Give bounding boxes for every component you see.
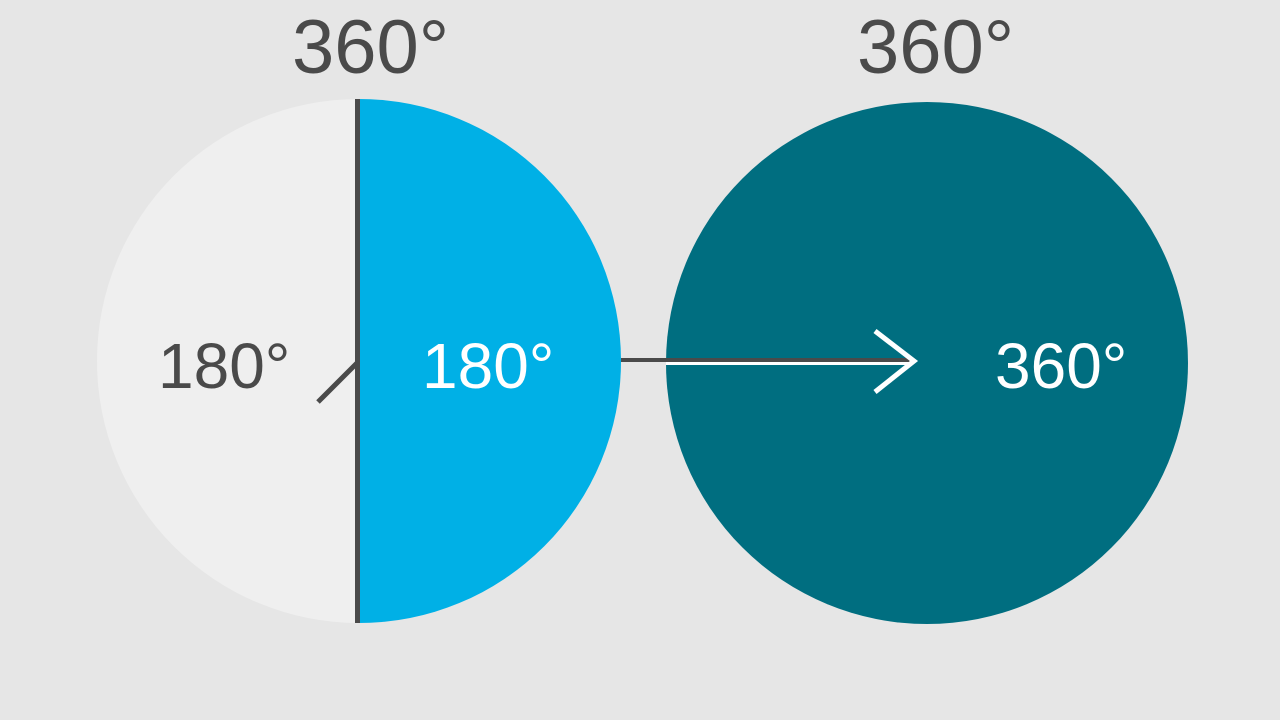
label right half 180°: 180° [422,330,554,402]
label right circle 360°: 360° [995,330,1127,402]
heading left: 360°: 360° [292,5,449,90]
right circle [666,102,1188,624]
label left half 180°: 180° [158,330,290,402]
heading right: 360°: 360° [857,5,1014,90]
right half (blue) [359,99,621,623]
divider line [355,99,360,623]
left half (light) [97,99,359,623]
left circle: half and half [97,99,621,623]
arrow [621,331,914,392]
small diagonal hand [318,362,358,402]
